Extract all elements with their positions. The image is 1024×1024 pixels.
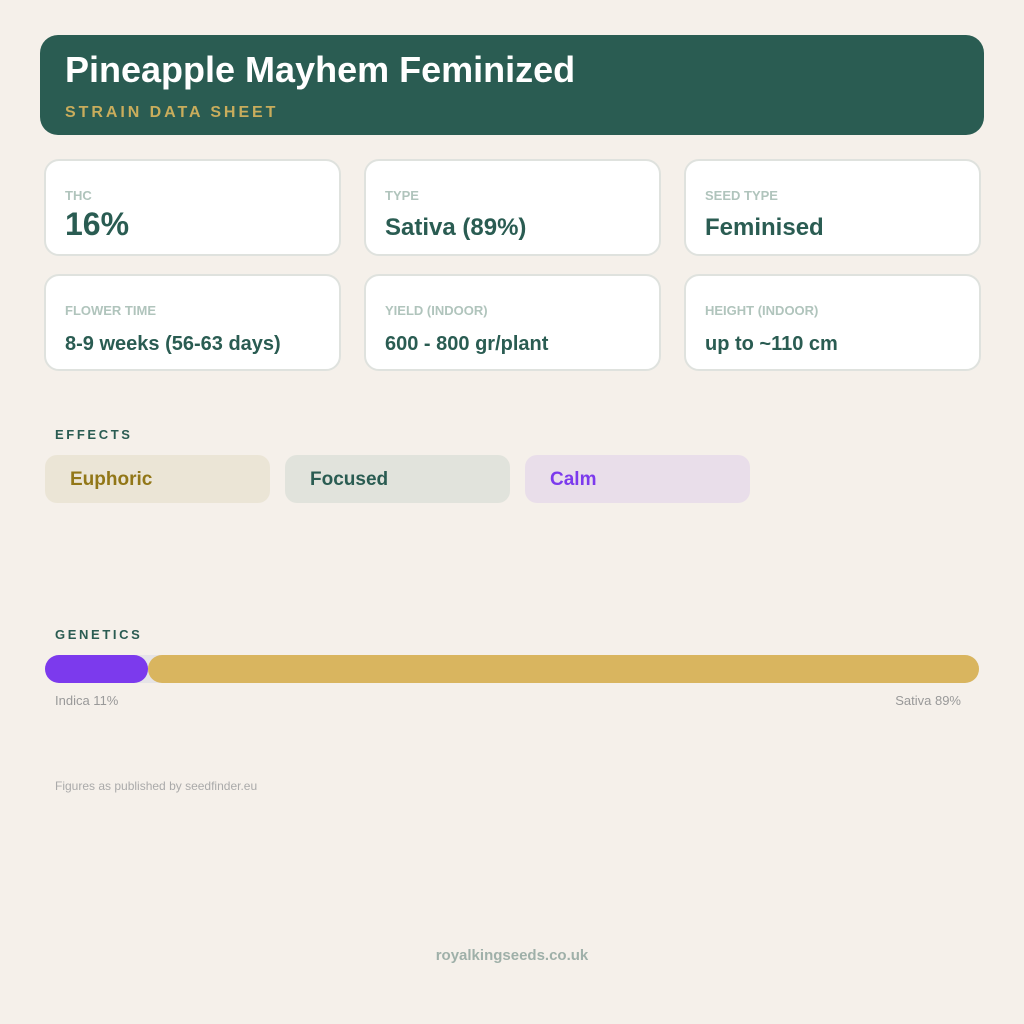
title: Pineapple Mayhem Feminized xyxy=(65,49,575,90)
genetics bar xyxy=(45,655,979,683)
value: height: up to ~110 cm xyxy=(705,333,838,355)
value: type: Sativa (89%) xyxy=(385,214,526,241)
value: 16%: 16% xyxy=(65,206,129,242)
value: seed type: Feminised xyxy=(705,214,824,241)
bar segment: indica xyxy=(45,655,148,683)
effect tag: Euphoric: Euphoric xyxy=(70,469,152,490)
label: flower time: FLOWER TIME xyxy=(65,303,156,318)
footer website: royalkingseeds.co.uk xyxy=(436,947,588,964)
stat card: type xyxy=(364,159,661,256)
stat card: yield xyxy=(364,274,661,371)
bar segment: sativa xyxy=(148,655,979,683)
value: yield: 600 - 800 gr/plant xyxy=(385,333,548,355)
heading: effects: EFFECTS xyxy=(55,427,133,442)
source note: Figures as published by seedfinder.eu xyxy=(55,779,257,793)
stat card: THC xyxy=(44,159,341,256)
stat card: flower time xyxy=(44,274,341,371)
effect tag: Calm xyxy=(525,455,750,503)
label: seed type: SEED TYPE xyxy=(705,188,778,203)
heading: genetics: GENETICS xyxy=(55,627,142,642)
subtitle: STRAIN DATA SHEET xyxy=(65,104,278,121)
effect tag: Euphoric xyxy=(45,455,270,503)
label: height: HEIGHT (INDOOR) xyxy=(705,303,818,318)
effect tag: Focused: Focused xyxy=(310,469,388,490)
stat card: height xyxy=(684,274,981,371)
label: THC: THC xyxy=(65,188,92,203)
value: flower time: 8-9 weeks (56-63 days) xyxy=(65,333,281,355)
label: sativa share: Sativa 89% xyxy=(895,693,961,708)
effect tag: Focused xyxy=(285,455,510,503)
header banner xyxy=(40,35,984,135)
label: type: TYPE xyxy=(385,188,419,203)
label: indica share: Indica 11% xyxy=(55,693,118,708)
label: yield: YIELD (INDOOR) xyxy=(385,303,488,318)
effect tag: Calm: Calm xyxy=(550,469,596,490)
stat card: seed type xyxy=(684,159,981,256)
